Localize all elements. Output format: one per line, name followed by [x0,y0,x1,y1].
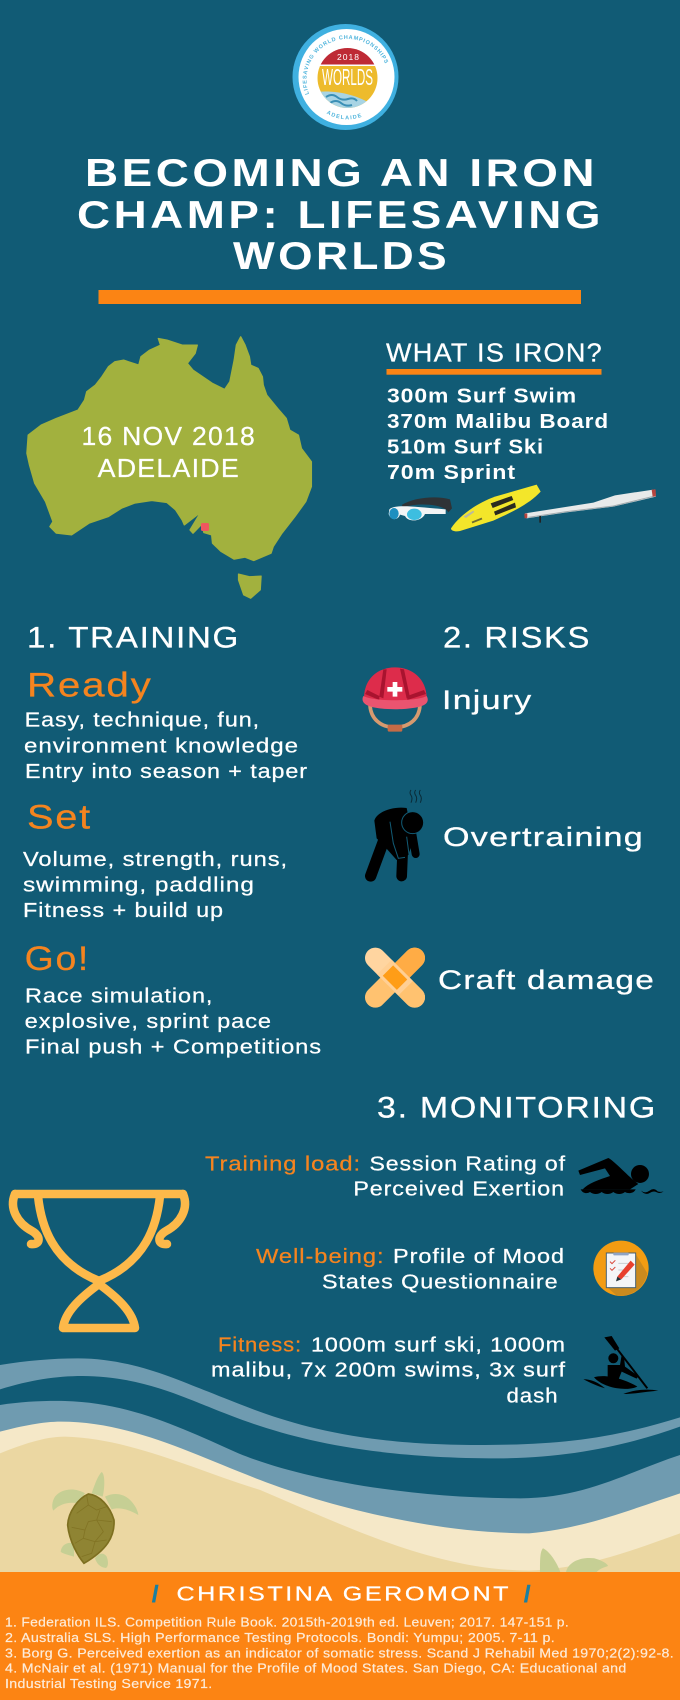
map of Australia [27,337,311,598]
footer band [0,1572,680,1700]
logo: 2018 Worlds badge: LIFESAVING WORLD CHAMPIONSHIPS [302,35,388,95]
monitoring: well-being: Profile of Mood [393,1246,565,1268]
monitoring: well-being: Well-being: [256,1246,385,1268]
monitoring: training load: Training load: [205,1154,361,1176]
author name: / [152,1581,159,1607]
training: Go: Go! [25,940,90,978]
icons: goggles, malibu board, surf ski [389,485,656,531]
logo: 2018 Worlds badge: ADELAIDE [326,110,362,120]
monitoring: fitness: dash [506,1385,558,1407]
date and place on map [82,423,256,483]
malibu board [451,485,541,531]
risk label: Overtraining: Overtraining [443,822,644,852]
turtle on the sand [52,1472,138,1568]
training: Set: Volume, strength, runs, [23,849,288,871]
beach background with waves and sand [0,1358,680,1572]
icon: exhausted person [371,790,424,876]
title: WORLDS [233,235,450,278]
section heading: risks: 2. RISKS [443,621,591,654]
section heading: training: 1. TRAINING [27,621,240,654]
risk label: Injury: Injury [442,685,532,715]
title [77,152,604,278]
references: 2. Australia SLS. High Performance Testing Protocols. Bondi: Yumpu; 2005. 7-11 p. [5,1630,555,1645]
title: CHAMP: LIFESAVING [77,194,604,237]
monitoring: well-being [256,1246,565,1293]
trophy [13,1194,185,1328]
logo: 2018 Worlds badge: WORLDS [322,64,373,90]
references [5,1615,674,1691]
training: Ready [24,667,308,783]
icon: helmet [363,667,428,732]
monitoring: training load: Perceived Exertion [353,1179,565,1201]
training: Ready: Entry into season + taper [25,761,308,783]
logo: 2018 Worlds badge [292,24,398,130]
second turtle flippers [540,1548,608,1572]
date and place on map: 16 NOV 2018 [82,423,256,451]
author name [152,1581,531,1607]
training: Set: swimming, paddling [23,875,255,897]
date and place on map: ADELAIDE [98,455,240,483]
icon: swimmer [578,1158,664,1194]
training: Go: Final push + Competitions [25,1036,322,1058]
What is Iron underline [386,369,602,375]
training: Go: explosive, sprint pace [25,1011,272,1033]
Iron race distances: 510m Surf Ski [387,436,544,458]
icon: kayaker [583,1336,658,1394]
references: Industrial Testing Service 1971. [5,1676,212,1691]
icon: clipboard [593,1241,649,1296]
goggles [389,497,452,520]
monitoring: fitness: Fitness: [218,1335,302,1357]
section heading: monitoring: 3. MONITORING [377,1091,657,1124]
author name: CHRISTINA GEROMONT [176,1584,511,1606]
monitoring: training load: Session Rating of [370,1154,566,1176]
monitoring: fitness: 1000m surf ski, 1000m [311,1335,566,1357]
training: Ready: Easy, technique, fun, [25,710,260,732]
Iron race distances: 70m Sprint [387,462,516,484]
Iron race distances: 370m Malibu Board [387,411,609,433]
monitoring: fitness: malibu, 7x 200m swims, 3x surf [211,1360,566,1382]
training: Set: Set [27,798,92,836]
monitoring: fitness [211,1335,566,1407]
Adelaide marker [201,523,209,531]
icon: crossed bandage [361,943,429,1012]
Iron race distances [387,385,609,484]
references: 3. Borg G. Perceived exertion as an indicator of somatic stress. Scand J Rehabil Med 1970;2(2):92-8. [5,1645,674,1660]
title: BECOMING AN IRON [85,152,598,195]
surf ski [524,489,656,523]
monitoring: well-being: States Questionnaire [322,1271,558,1293]
training: Go: Race simulation, [25,985,213,1007]
training: Ready: environment knowledge [24,735,299,757]
monitoring: training load [205,1154,566,1201]
training: Set: Fitness + build up [23,900,224,922]
training: Set [23,798,288,922]
references: 1. Federation ILS. Competition Rule Book. 2015th-2019th ed. Leuven; 2017. 147-151 p. [5,1615,569,1630]
logo: 2018 Worlds badge: 2018 [337,52,360,62]
training: Ready: Ready [27,667,153,705]
Iron race distances: 300m Surf Swim [387,385,577,407]
title underline bar [98,290,581,304]
What is Iron heading: WHAT IS IRON? [386,340,603,368]
author name: / [524,1581,531,1607]
risk label: Craft damage: Craft damage [438,965,655,995]
training: Go [25,940,322,1058]
references: 4. McNair et al. (1971) Manual for the Profile of Mood States. San Diego, CA: Educational and [5,1661,627,1676]
